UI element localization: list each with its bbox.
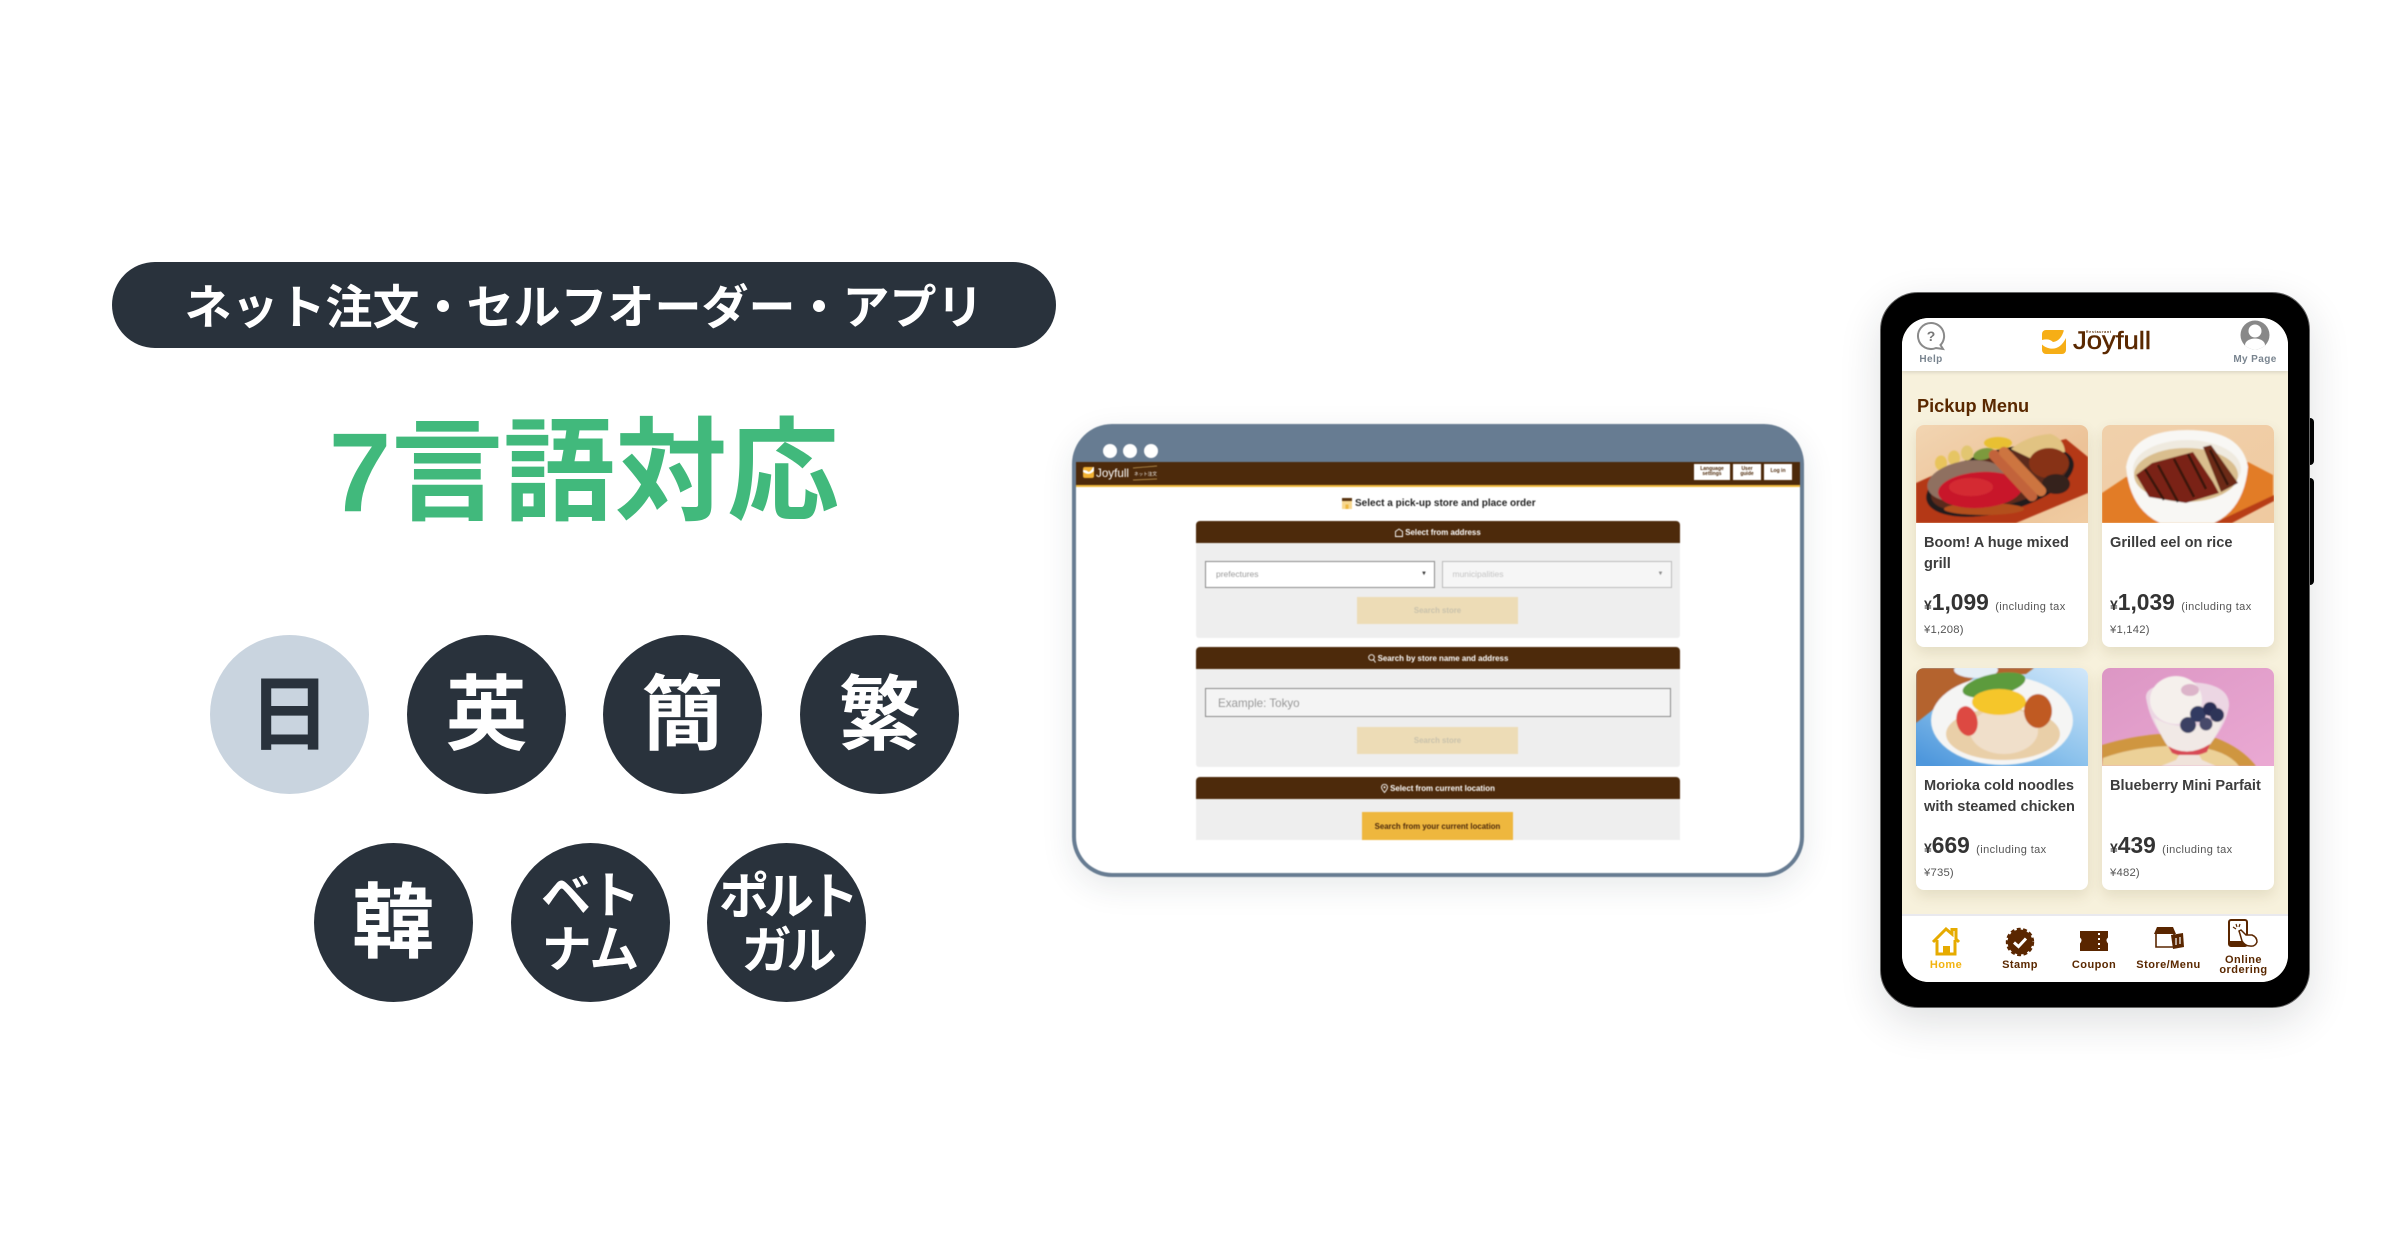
badge: Korean: 韓 [352,878,434,968]
item name: with steamed chicken [1924,799,2075,815]
panel: select from current location [1196,777,1680,840]
dropdown: prefectures: ▼ [1421,571,1427,577]
site logo: Joyfull [1096,466,1129,480]
badge: Vietnamese: ベト [541,868,639,924]
browser window dots [1102,443,1159,459]
item price: ¥669 (including tax [1924,832,2047,858]
button: language settings [1694,464,1730,480]
icon: home [1932,927,1960,956]
dropdown: prefectures: prefectures [1216,569,1259,579]
label: store and menu: Store/Menu [2136,959,2201,971]
item price with tax: ¥482) [2110,867,2140,879]
button: language settings: settings [1702,471,1722,477]
title: 7 languages supported: 7言語対応 [329,410,839,535]
button: user guide: User [1741,466,1753,472]
logo: Joyfull: Restaurant [2086,330,2112,334]
panel: select from address [1196,521,1680,638]
label: coupon: Coupon [2072,959,2116,971]
item name: grill [1924,556,1951,572]
icon: help [1917,322,1946,350]
badge: Traditional Chinese [800,635,959,794]
item name: Boom! A huge mixed [1924,534,2069,550]
dropdown: municipalities: ▼ [1658,571,1664,577]
label: online ordering [2219,954,2268,976]
item price with tax: ¥1,208) [1924,624,1964,636]
icon: online ordering [2228,919,2258,947]
item price with tax: ¥735) [1924,867,1954,879]
site logo [1082,465,1158,481]
item name: Blueberry Mini Parfait [2110,778,2261,794]
button: user guide [1733,464,1761,480]
badge: Japanese: 日 [248,670,330,760]
photo: mixed grill [1916,425,2088,523]
label: online ordering: Online [2225,954,2262,966]
item name: Morioka cold noodles [1924,778,2074,794]
browser page area [1076,462,1800,873]
button: search from current location [1362,812,1513,840]
section heading: pickup menu: Pickup Menu [1917,396,2029,416]
label: stamp: Stamp [2002,959,2038,971]
badge: Korean [314,843,472,1002]
badge: Simplified Chinese [603,635,762,794]
panel header [1196,647,1680,669]
dropdown: municipalities [1442,561,1672,588]
dropdown: prefectures [1205,561,1435,588]
menu card: cold noodles [1916,668,2088,890]
browser mockup: web ordering page [1072,424,1804,877]
menu card: mixed grill [1916,425,2088,647]
button: search store: Search store [1414,736,1461,745]
panel header [1196,777,1680,799]
item name [1924,534,2069,572]
pill heading: channels: ネット注文・セルフオーダー・アプリ [184,281,984,334]
item price: ¥1,039 (including tax [2110,589,2252,615]
panel header: Select from current location [1390,784,1495,792]
button: search store [1357,727,1518,754]
button: search store: Search store [1414,606,1461,615]
badge: Vietnamese: ナム [542,922,638,978]
icon: coupon [2080,931,2108,951]
panel: search by store name [1196,647,1680,767]
menu card: grilled eel [2102,425,2274,647]
badge: Traditional Chinese: 繁 [838,670,920,760]
menu card: blueberry parfait [2102,668,2274,890]
photo: parfait [2102,668,2274,766]
app header [1902,318,2288,371]
icon: my page [2240,320,2270,350]
button: user guide: guide [1740,471,1754,477]
badge: Portuguese: ガル [742,922,832,978]
label: help: Help [1919,354,1943,364]
badge: English: 英 [445,670,528,760]
text input: example Tokyo: Example: Tokyo [1218,697,1300,710]
phone side buttons [2310,418,2314,585]
label: home: Home [1930,959,1962,971]
photo: cold noodles [1916,668,2088,766]
site header bar [1076,462,1800,487]
panel header: Select from address [1405,528,1481,536]
label: online ordering: ordering [2219,964,2268,976]
badge: English [407,635,566,794]
dropdown: municipalities: municipalities [1452,569,1504,579]
page heading: Select a pick-up store and place order [1355,498,1536,508]
button: log in [1764,464,1792,480]
item name: Grilled eel on rice [2110,534,2232,550]
badge: Japanese [210,635,369,794]
button: search store [1357,597,1518,624]
item price: ¥439 (including tax [2110,832,2233,858]
site logo: ネット注文 [1134,470,1157,478]
badge: Simplified Chinese: 簡 [641,670,724,760]
item price with tax: ¥1,142) [2110,624,2150,636]
phone mockup: mobile app [1880,292,2310,1008]
icon: store [1341,497,1353,510]
button: search from current location: Search from your current location [1375,822,1500,830]
badge: Vietnamese [510,843,670,1002]
bottom navigation bar [1902,914,2288,982]
icon: store and menu [2154,927,2184,949]
button: log in: Log in [1770,468,1786,474]
panel header [1196,521,1680,543]
photo: eel on rice [2102,425,2274,523]
item price: ¥1,099 (including tax [1924,589,2066,615]
label: my page: My Page [2233,354,2277,364]
button: language settings: Language [1700,466,1724,472]
phone screen [1902,318,2288,982]
pill heading: channels [112,262,1056,348]
badge: Portuguese [707,843,866,1002]
language badges [210,635,959,1002]
panel header: Search by store name and address [1378,654,1508,662]
logo: Joyfull [2042,329,2151,355]
icon: stamp [2006,928,2034,956]
item name [1924,778,2075,815]
icon: help: ? [1927,328,1935,344]
badge: Portuguese: ポルト [719,868,854,924]
text input: example Tokyo [1205,688,1670,717]
